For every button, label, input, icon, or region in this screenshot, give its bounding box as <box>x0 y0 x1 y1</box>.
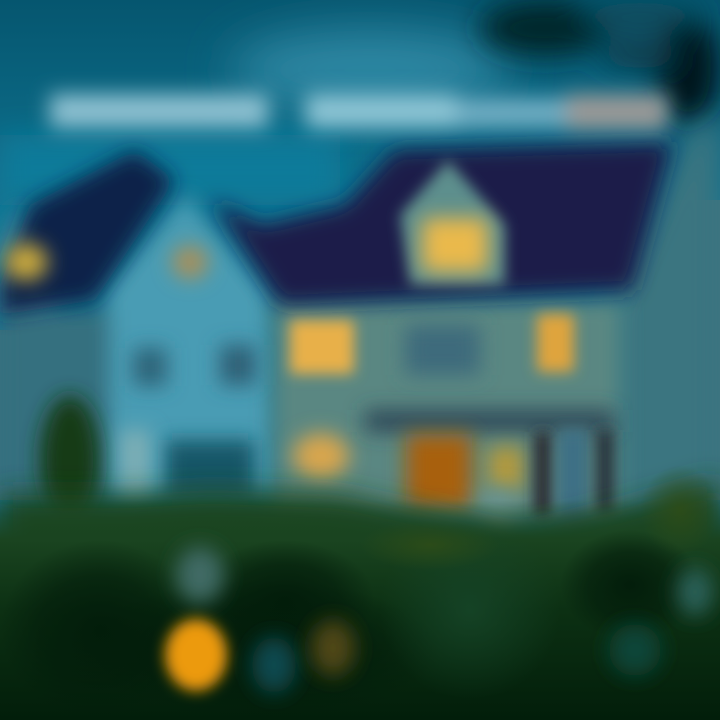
neighbouring wall, right <box>610 115 720 520</box>
left house wall <box>0 195 275 500</box>
bokeh: right teal <box>677 568 713 616</box>
dormer gable <box>400 160 505 285</box>
window: left gable <box>172 245 208 279</box>
dark conifer, left <box>40 395 100 525</box>
window: lower middle <box>293 433 349 479</box>
porch roof <box>365 410 615 432</box>
porch columns <box>480 490 514 540</box>
door side light <box>488 446 524 490</box>
dark windows <box>133 325 480 500</box>
window: far left <box>4 243 48 281</box>
lit windows <box>4 218 574 479</box>
bokeh lights <box>165 547 713 693</box>
bokeh: grey-teal <box>176 547 224 603</box>
dark tree foliage, top right <box>480 0 720 125</box>
title (illegible in the reference, drawn as a blurred light band) <box>50 94 668 130</box>
bokeh: lower right teal <box>609 624 661 676</box>
window: upper middle <box>290 320 354 374</box>
bokeh: bright orange <box>165 619 227 691</box>
main house wall <box>272 300 622 525</box>
front door glow <box>406 434 472 508</box>
bokeh: dim amber <box>311 620 355 676</box>
porch <box>120 410 615 540</box>
roof <box>0 142 672 315</box>
bokeh: teal <box>252 637 296 693</box>
window: dormer <box>422 218 488 272</box>
garden foliage <box>0 465 720 720</box>
window: upper right <box>537 314 574 372</box>
